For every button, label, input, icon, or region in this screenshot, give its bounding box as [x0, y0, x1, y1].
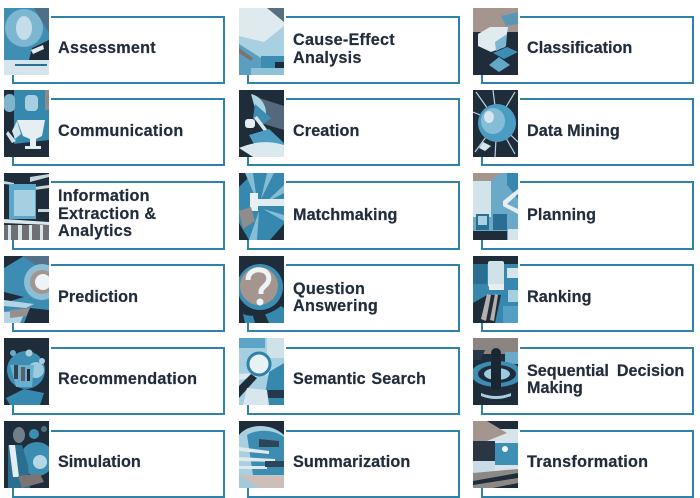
icon: man with virtual screen	[4, 421, 49, 488]
card: Data Mining	[473, 90, 694, 166]
icon: hand writing	[239, 90, 284, 157]
card: Assessment	[4, 8, 225, 84]
icon: data server	[4, 173, 49, 240]
card: Sequential Decision Making	[473, 338, 694, 415]
label: Making	[527, 379, 583, 397]
label: Semantic Search	[293, 370, 426, 388]
card: Information Extraction & Analytics	[4, 173, 225, 250]
card: Question Answering	[239, 256, 460, 332]
icon: light streaks	[239, 8, 284, 75]
label	[527, 362, 684, 397]
icon: glowing head with hand	[4, 8, 49, 75]
card: Transformation	[473, 421, 694, 498]
card: Planning	[473, 173, 694, 250]
label: Analysis	[293, 48, 362, 66]
card: Simulation	[4, 421, 225, 498]
label: Transformation	[527, 453, 648, 471]
label: Summarization	[293, 453, 410, 471]
label	[293, 31, 395, 67]
label: Classification	[527, 39, 632, 57]
icon: radial light	[4, 256, 49, 323]
icon: magnifying glass	[239, 338, 284, 405]
card: Semantic Search	[239, 338, 460, 415]
label	[58, 187, 156, 240]
card: Communication	[4, 90, 225, 166]
label: Ranking	[527, 288, 592, 306]
icon: question mark in lens	[239, 256, 284, 323]
card: Classification	[473, 8, 694, 84]
card: Prediction	[4, 256, 225, 332]
card: Creation	[239, 90, 460, 166]
label: Prediction	[58, 288, 138, 306]
card: Recommendation	[4, 338, 225, 415]
icon: data globe	[473, 90, 518, 157]
label	[293, 280, 378, 315]
label: Sequential Decision	[527, 362, 684, 380]
label: Question	[293, 280, 365, 298]
icon: planning boards	[473, 173, 518, 240]
label: Cause-Effect	[293, 31, 395, 49]
card: Cause-Effect Analysis	[239, 8, 460, 84]
icon: hand on screens	[473, 256, 518, 323]
icon: text dome	[239, 421, 284, 488]
label: Data Mining	[527, 122, 620, 140]
icon: shopping cart	[4, 338, 49, 405]
card: Ranking	[473, 256, 694, 332]
label: Matchmaking	[293, 206, 398, 224]
label: Answering	[293, 297, 378, 315]
label: Assessment	[58, 39, 156, 57]
label: Creation	[293, 122, 359, 140]
label: Recommendation	[58, 370, 197, 388]
label: Simulation	[58, 453, 141, 471]
icon: cubes	[473, 8, 518, 75]
label: Information	[58, 187, 150, 205]
label: Communication	[58, 122, 184, 140]
icon: person with ripples	[473, 338, 518, 405]
icon: hands with network	[239, 173, 284, 240]
icon: robot	[4, 90, 49, 157]
label: Analytics	[58, 222, 132, 240]
icon: light tunnel	[473, 421, 518, 488]
card: Summarization	[239, 421, 460, 498]
label: Extraction &	[58, 205, 156, 223]
label: Planning	[527, 206, 596, 224]
card: Matchmaking	[239, 173, 460, 250]
